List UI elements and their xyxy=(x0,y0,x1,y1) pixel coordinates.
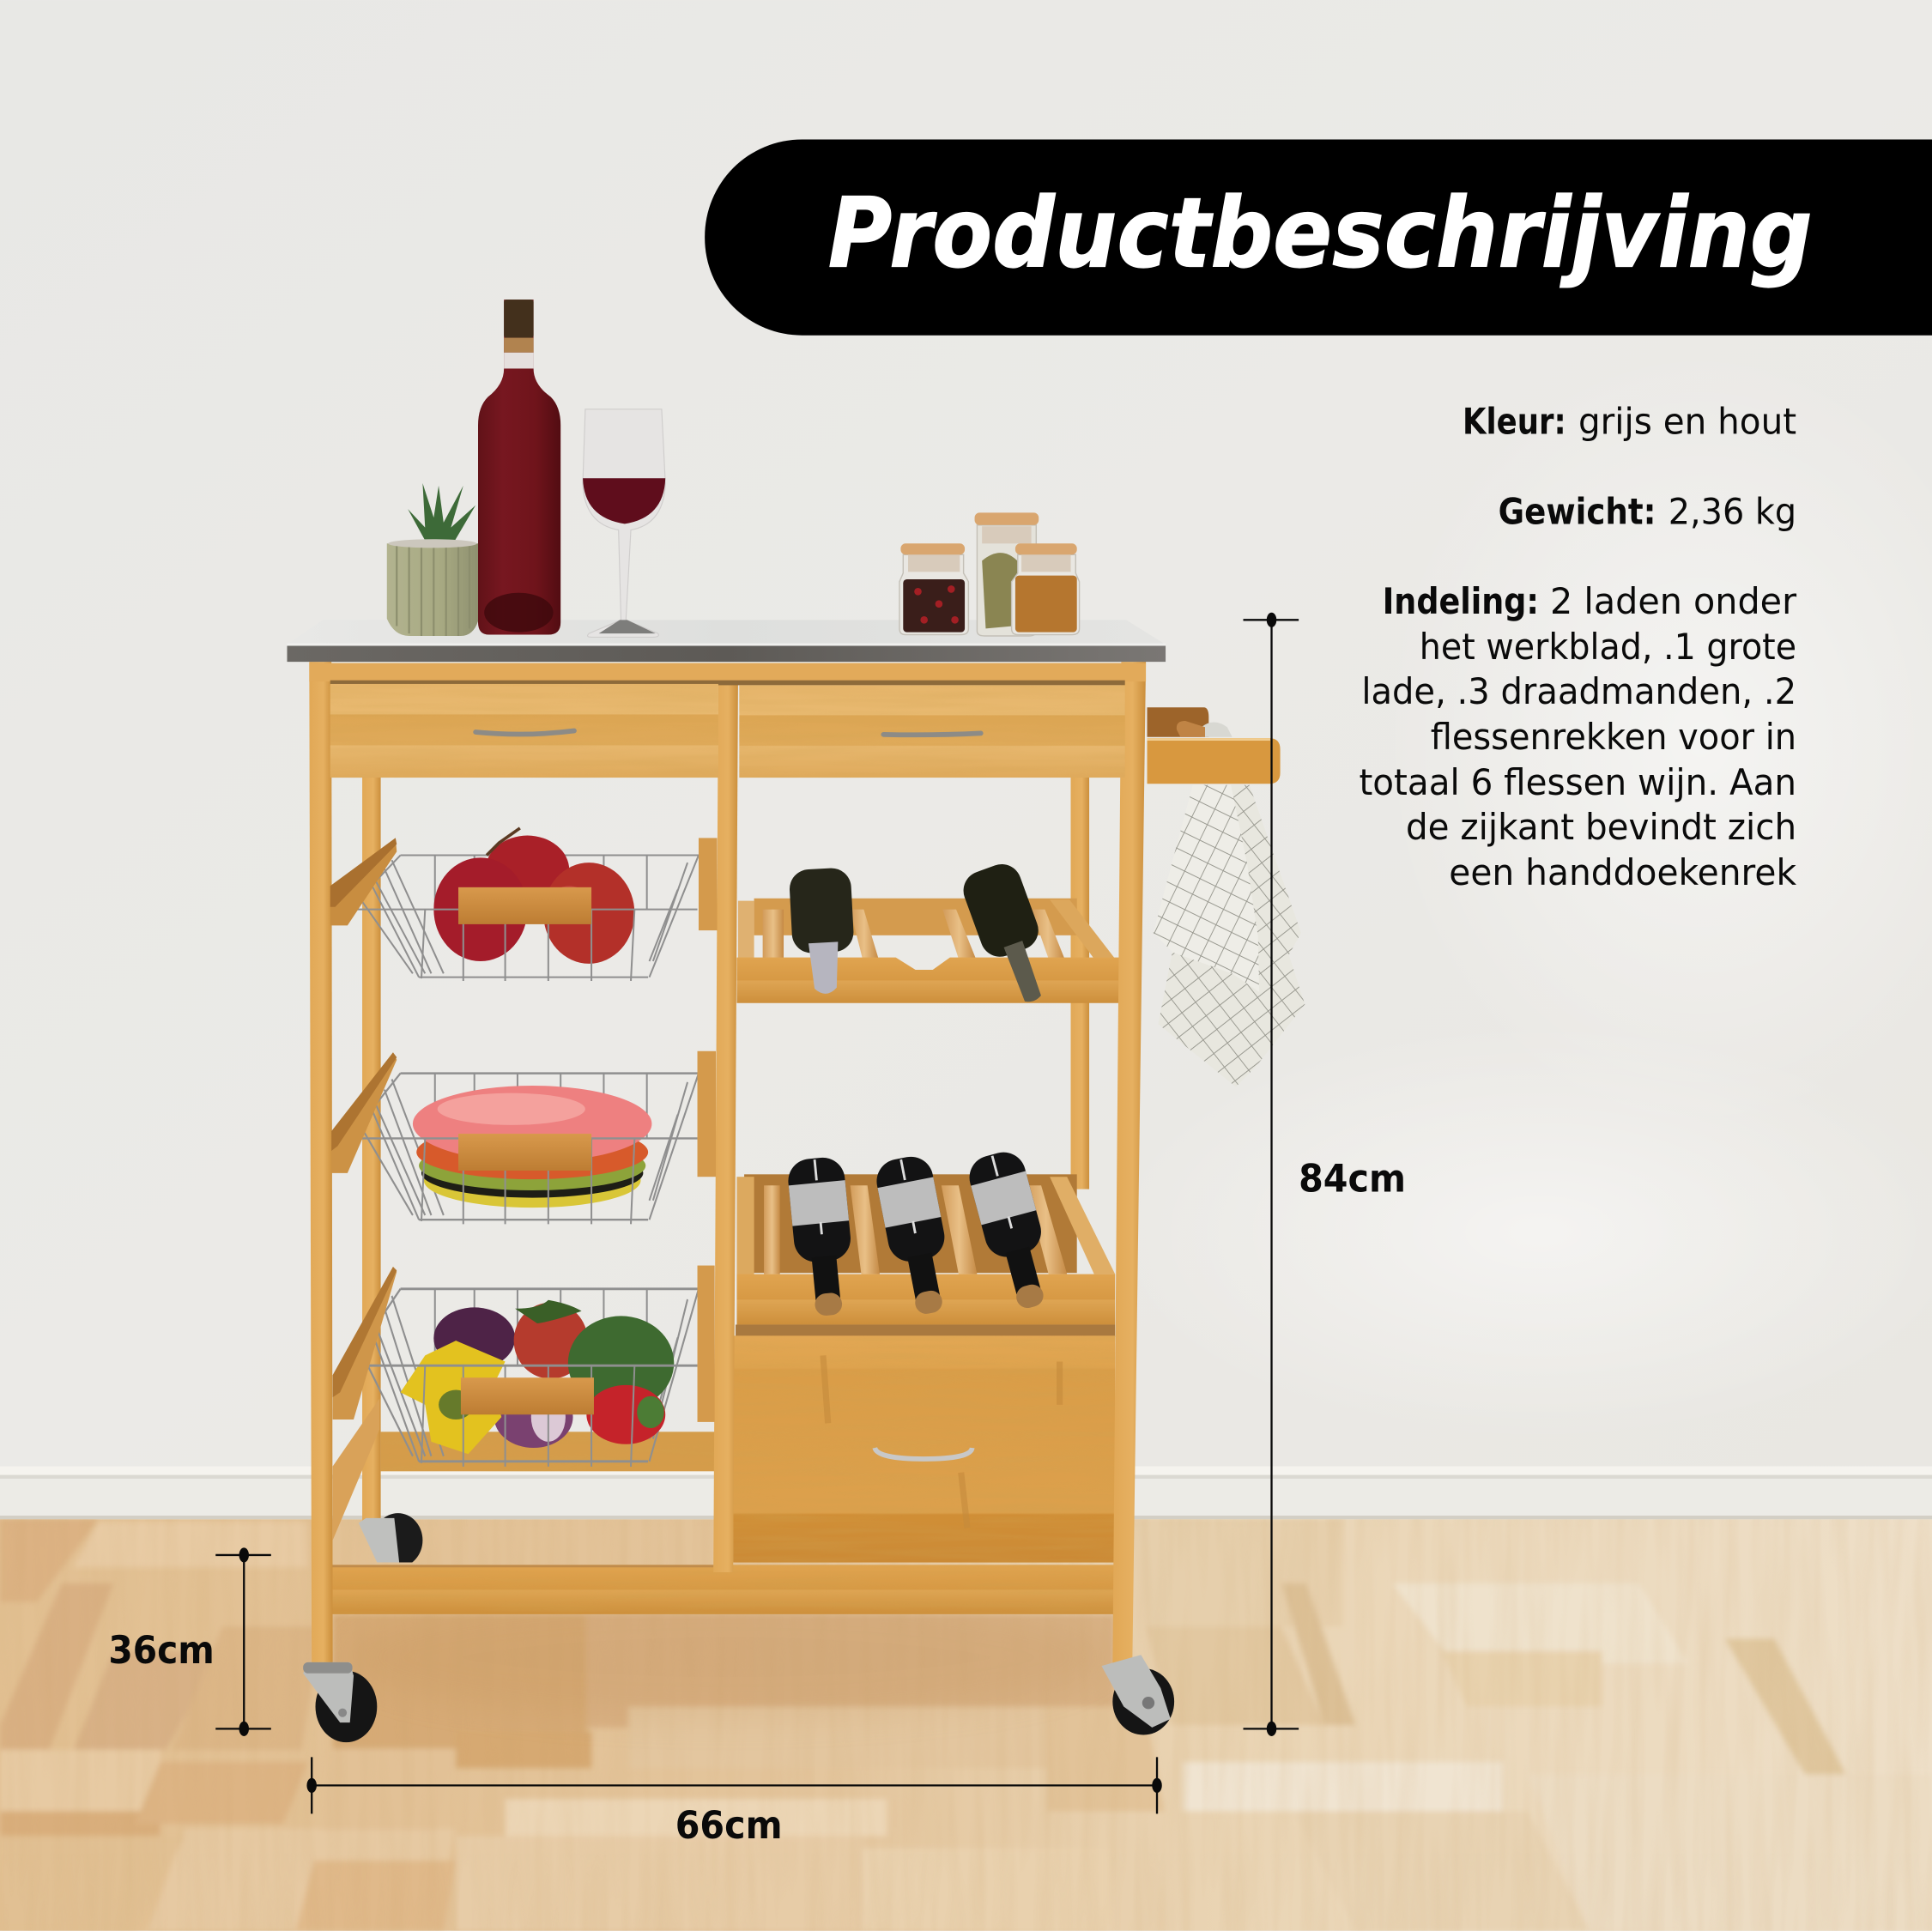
front right castor xyxy=(1101,1655,1174,1735)
product specifications text xyxy=(1359,401,1797,893)
front legs xyxy=(309,662,1146,1671)
label: 36cm xyxy=(108,1629,215,1673)
basket with apples xyxy=(330,828,718,981)
layout spec: een handdoekenrek xyxy=(1449,851,1796,893)
large drawer xyxy=(733,1324,1115,1563)
baseboard xyxy=(0,1467,1932,1519)
dimension: height 84cm xyxy=(1244,613,1406,1736)
layout spec: Indeling: xyxy=(1383,580,1539,622)
bottles in lower rack xyxy=(786,1147,1060,1318)
colour spec xyxy=(1463,401,1796,443)
layout spec xyxy=(1359,580,1797,893)
right parquet xyxy=(1238,1519,1341,1625)
bottles in top rack xyxy=(789,859,1062,1011)
lower shelf board xyxy=(381,1432,715,1471)
title text: Productbeschrijving xyxy=(828,178,1813,289)
wooden floor xyxy=(0,1519,1932,1931)
bottle right xyxy=(958,859,1062,1011)
basket handles xyxy=(330,838,718,930)
tea towel xyxy=(1154,785,1305,1087)
colour spec: grijs en hout xyxy=(1578,401,1796,443)
wall background xyxy=(0,0,1932,1468)
wine bottle xyxy=(478,300,560,635)
layout spec: de zijkant bevindt zich xyxy=(1406,806,1796,848)
weight spec xyxy=(1499,490,1796,532)
lower wine rack xyxy=(736,1174,1115,1324)
drawer handle xyxy=(875,1448,972,1459)
basket handles xyxy=(331,1051,716,1177)
dimension: leg height 36cm xyxy=(108,1547,271,1736)
handle xyxy=(475,731,574,735)
colour spec: Kleur: xyxy=(1463,401,1566,443)
towel rail xyxy=(1148,707,1281,784)
back wheel xyxy=(359,1513,422,1567)
front left castor xyxy=(303,1662,377,1742)
handle xyxy=(883,733,981,735)
title banner xyxy=(705,139,1932,336)
kitchen trolley xyxy=(287,620,1305,1742)
back legs xyxy=(362,777,1089,1522)
ground spice jar xyxy=(1012,543,1080,635)
plates xyxy=(413,1086,651,1208)
apples xyxy=(433,828,634,964)
weight spec: 2,36 kg xyxy=(1669,490,1796,532)
apron xyxy=(309,663,1146,685)
bay leaf jar xyxy=(975,512,1039,636)
layout spec: het werkblad, .1 grote xyxy=(1420,626,1796,668)
worktop xyxy=(287,620,1166,662)
label: 66cm xyxy=(675,1804,783,1848)
top wine rack xyxy=(736,899,1119,1003)
vegetables xyxy=(401,1300,674,1454)
layout spec: 2 laden onder xyxy=(1550,580,1797,622)
right top drawer xyxy=(739,685,1125,778)
basket with vegetables xyxy=(333,1266,715,1467)
left top drawer xyxy=(330,684,718,778)
spice jars xyxy=(899,512,1080,636)
potted plant xyxy=(387,483,478,636)
under the cart xyxy=(333,1614,586,1748)
left parquet xyxy=(0,1519,99,1601)
wine glass xyxy=(583,409,665,637)
bottom rail xyxy=(331,1565,1114,1614)
dimension: width 66cm xyxy=(306,1757,1162,1848)
basket with plates xyxy=(331,1051,716,1224)
layout spec: totaal 6 flessen wijn. Aan xyxy=(1359,761,1796,803)
label: 84cm xyxy=(1299,1157,1406,1201)
layout spec: lade, .3 draadmanden, .2 xyxy=(1361,670,1796,712)
layout spec: flessenrekken voor in xyxy=(1431,716,1796,758)
peppercorn jar xyxy=(899,543,968,635)
basket handles xyxy=(333,1266,715,1422)
weight spec: Gewicht: xyxy=(1499,490,1656,532)
side brace xyxy=(333,1399,379,1541)
bottle left xyxy=(789,867,857,996)
